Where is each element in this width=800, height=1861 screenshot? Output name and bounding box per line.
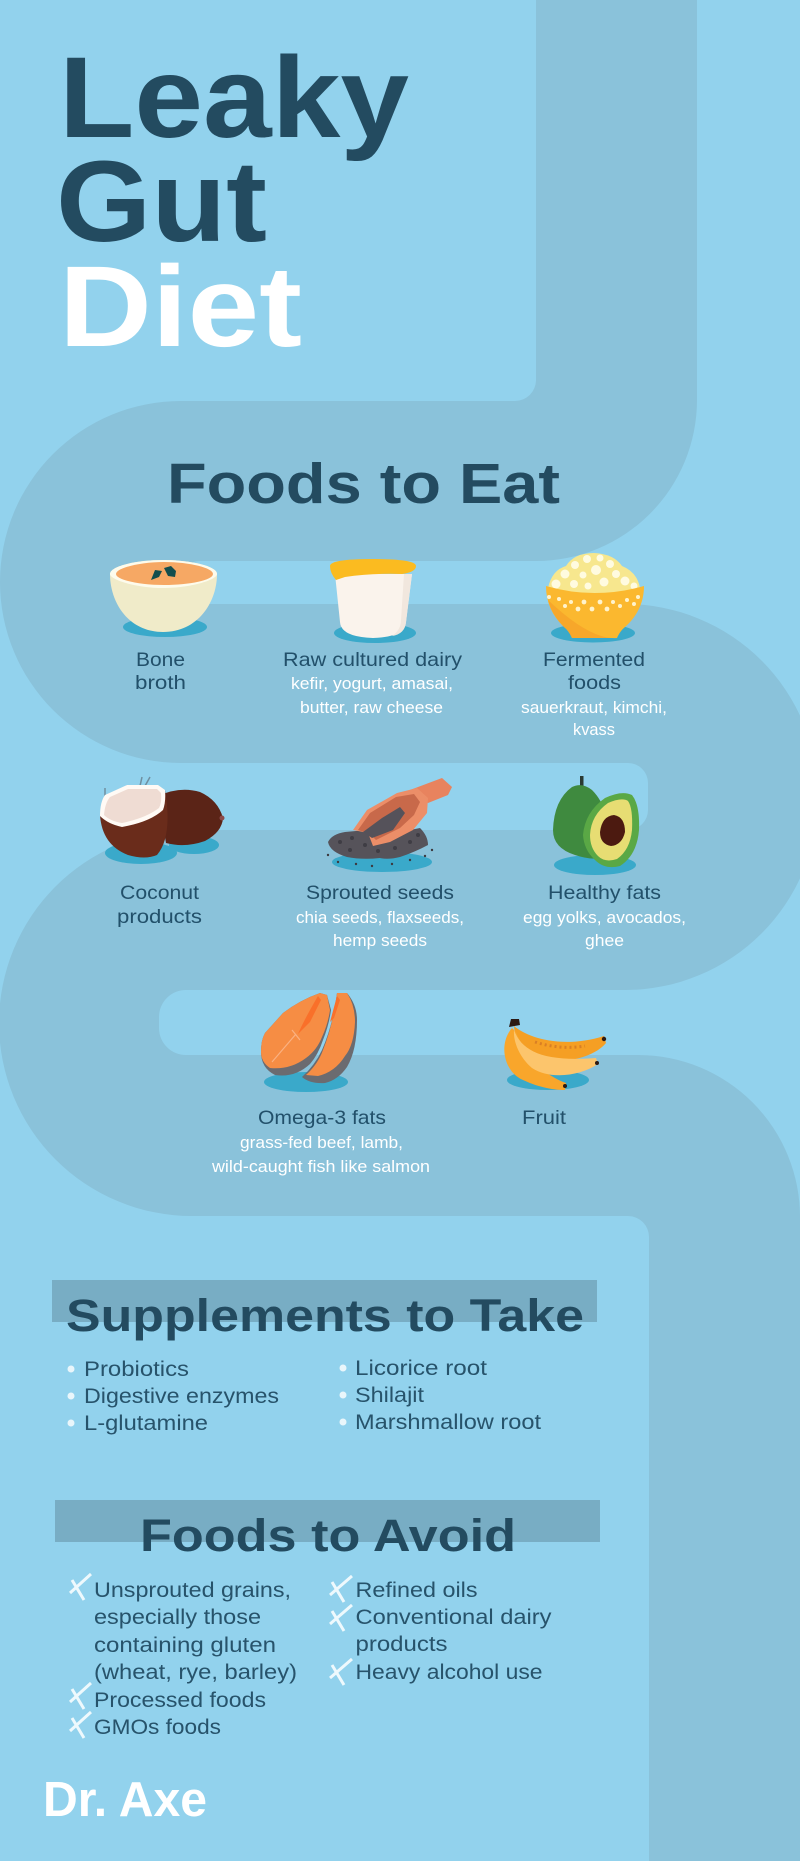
list: foods to avoid column one: containing gluten [94, 1634, 276, 1657]
list: foods to avoid column one: especially those [94, 1606, 261, 1629]
list: foods to avoid column two: Refined oils [356, 1579, 478, 1602]
label: sprouted seeds: chia seeds, flaxseeds, [296, 909, 464, 927]
list: foods to avoid column two: Heavy alcohol use [356, 1661, 542, 1684]
list: supplements column one [68, 1358, 279, 1435]
label: bone broth: Bone [136, 649, 185, 671]
label: omega-3 fats: Omega-3 fats [258, 1107, 386, 1129]
label: raw cultured dairy [283, 649, 462, 717]
label: omega-3 fats [211, 1107, 430, 1176]
title: Gut [56, 138, 267, 266]
list: supplements column two: Marshmallow root [355, 1411, 541, 1434]
label: sprouted seeds: Sprouted seeds [306, 882, 454, 904]
label: sprouted seeds [296, 882, 464, 950]
label: raw cultured dairy: butter, raw cheese [300, 699, 443, 717]
heading: foods to eat: Foods to Eat [167, 452, 560, 516]
list: foods to avoid column one: Unsprouted grains, [94, 1579, 291, 1602]
heading: foods to avoid: Foods to Avoid [140, 1510, 516, 1561]
list: foods to avoid column two [330, 1576, 552, 1685]
icon: coconut [100, 777, 224, 864]
list: supplements column one: L-glutamine [84, 1412, 208, 1435]
heading: supplements to take [52, 1280, 597, 1341]
list: foods to avoid column two: products [356, 1633, 448, 1656]
label: healthy fats [523, 882, 686, 950]
label: coconut products: Coconut [120, 882, 200, 904]
list: foods to avoid column one: (wheat, rye, barley) [94, 1661, 297, 1684]
icon: fermented foods bowl [546, 553, 644, 642]
list: foods to avoid column one: GMOs foods [94, 1716, 221, 1739]
list: foods to avoid column one: Processed foods [94, 1689, 266, 1712]
list: supplements column two: Licorice root [355, 1357, 487, 1380]
label: omega-3 fats: grass-fed beef, lamb, [240, 1134, 403, 1152]
label: fruit: Fruit [522, 1107, 567, 1129]
label: fermented foods [521, 649, 667, 739]
icon: bone broth bowl [110, 560, 217, 637]
label: fermented foods: Fermented [543, 649, 645, 671]
title: Diet [59, 243, 302, 371]
label: bone broth [135, 649, 186, 694]
label: sprouted seeds: hemp seeds [333, 932, 427, 950]
list: supplements column one: Digestive enzymes [84, 1385, 279, 1408]
icon: salmon steaks [261, 993, 357, 1092]
list: supplements column two [340, 1357, 541, 1434]
label: raw cultured dairy: Raw cultured dairy [283, 649, 462, 671]
list: foods to avoid column one [70, 1574, 297, 1739]
label: healthy fats: ghee [585, 932, 624, 950]
label: healthy fats: egg yolks, avocados, [523, 909, 686, 927]
list: supplements column two: Shilajit [355, 1384, 424, 1407]
heading: supplements to take: Supplements to Take [66, 1290, 584, 1341]
list: foods to avoid column two: Conventional dairy [356, 1606, 552, 1629]
icon: sprouted seeds and scoop [327, 778, 452, 872]
icon: avocado [553, 776, 639, 875]
label: coconut products [117, 882, 202, 928]
title: Leaky [59, 34, 409, 162]
label: healthy fats: Healthy fats [548, 882, 661, 904]
label: omega-3 fats: wild-caught fish like salmon [211, 1158, 430, 1176]
label: fermented foods: kvass [573, 721, 615, 739]
logo: Dr. Axe: Dr. Axe [43, 1773, 207, 1827]
title [56, 34, 409, 371]
icon: bananas [504, 1019, 606, 1090]
label: bone broth: broth [135, 672, 186, 694]
label: fermented foods: sauerkraut, kimchi, [521, 699, 667, 717]
label: raw cultured dairy: kefir, yogurt, amasai, [291, 675, 453, 693]
list: supplements column one: Probiotics [84, 1358, 189, 1381]
label: coconut products: products [117, 906, 202, 928]
label: fermented foods: foods [568, 672, 621, 694]
icon: raw dairy jar [330, 559, 416, 643]
heading: foods to avoid [55, 1500, 600, 1561]
